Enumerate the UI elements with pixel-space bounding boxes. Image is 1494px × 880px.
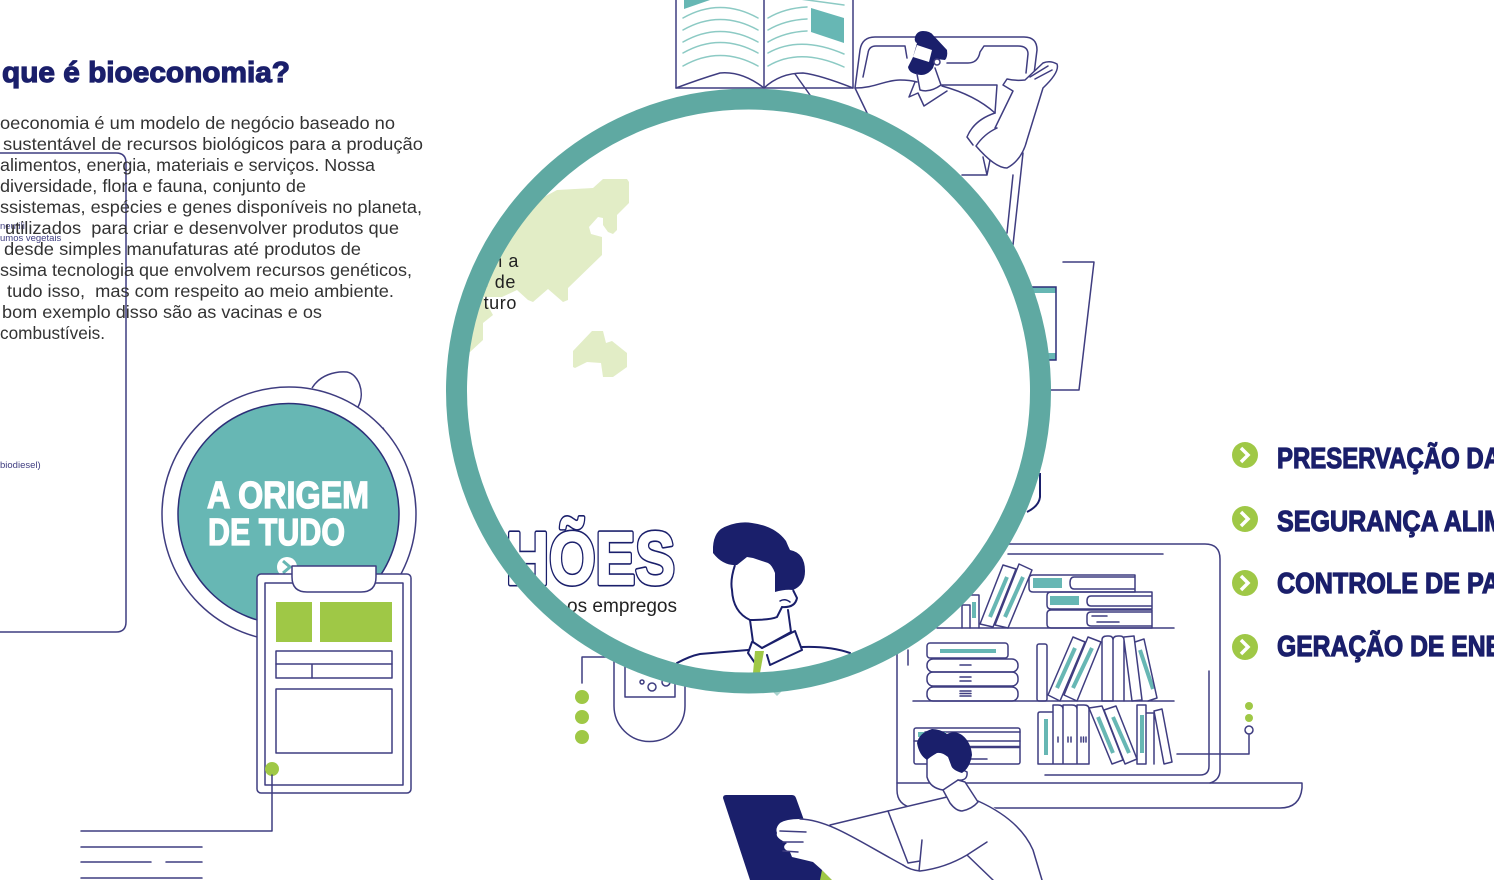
panel: rounded outline behind text: umos vegetais <box>0 233 62 244</box>
text: clipped caption in lens: turo <box>484 293 517 313</box>
text block: bioeconomy definition: ssima tecnologia que envolvem recursos genéticos, <box>0 260 412 280</box>
text block: bioeconomy definition: desde simples manufaturas até produtos de <box>4 239 361 259</box>
icon: clipboard <box>257 566 411 793</box>
icon: A origem de tudo badge <box>162 372 416 641</box>
lens ring <box>456 99 1040 683</box>
list: benefits with chevron bullets <box>1232 441 1494 663</box>
text: clipped caption in lens: m a <box>487 251 519 271</box>
text block: bioeconomy definition: utilizados para criar e desenvolver produtos que <box>5 218 399 238</box>
lens interior: white disc <box>456 99 1040 683</box>
illustration: bearded man with tablet frame <box>855 31 1057 245</box>
map: continents in pale green <box>460 179 629 377</box>
heading: outlined word HÕES: HÕES <box>506 517 675 600</box>
text: empregos: os empregos <box>567 595 677 617</box>
text block: bioeconomy definition: alimentos, energia, materiais e serviços. Nossa <box>0 155 375 175</box>
panel: rounded outline behind text: biodiesel) <box>0 460 41 471</box>
illustration: small frame right of the circle <box>1027 262 1094 512</box>
illustration: laptop with bookshelf <box>897 544 1302 808</box>
panel: rounded outline behind text <box>0 153 126 632</box>
text block: bioeconomy definition: diversidade, flora e fauna, conjunto de <box>0 176 306 196</box>
icon: A origem de tudo badge: A ORIGEM <box>207 475 369 517</box>
text block: bioeconomy definition: ssistemas, espécies e genes disponíveis no planeta, <box>0 197 422 217</box>
text block: bioeconomy definition <box>0 113 423 343</box>
panel: rounded outline behind text: neutili <box>0 221 25 232</box>
text block: bioeconomy definition: bom exemplo disso são as vacinas e os <box>2 302 322 322</box>
icon: A origem de tudo badge: DE TUDO <box>208 512 345 554</box>
icon: flask with bubbles <box>575 650 783 744</box>
heading: outlined word HÕES: HÕES <box>506 517 675 600</box>
text block: bioeconomy definition: tudo isso, mas com respeito ao meio ambiente. <box>7 281 394 301</box>
text block: bioeconomy definition: combustíveis. <box>0 323 105 343</box>
heading: que é bioeconomia: que é bioeconomia? <box>2 57 290 89</box>
text block: bioeconomy definition: oeconomia é um modelo de negócio baseado no <box>0 113 395 133</box>
connector and note lines under clipboard <box>81 775 272 878</box>
illustration: man reading tablet <box>723 729 1042 880</box>
text: clipped caption in lens <box>479 251 519 313</box>
illustration: man in lens <box>677 522 850 673</box>
text: clipped caption in lens: e de <box>479 272 516 292</box>
icon: open book <box>676 0 853 95</box>
text block: bioeconomy definition: sustentável de recursos biológicos para a produção <box>3 134 423 154</box>
